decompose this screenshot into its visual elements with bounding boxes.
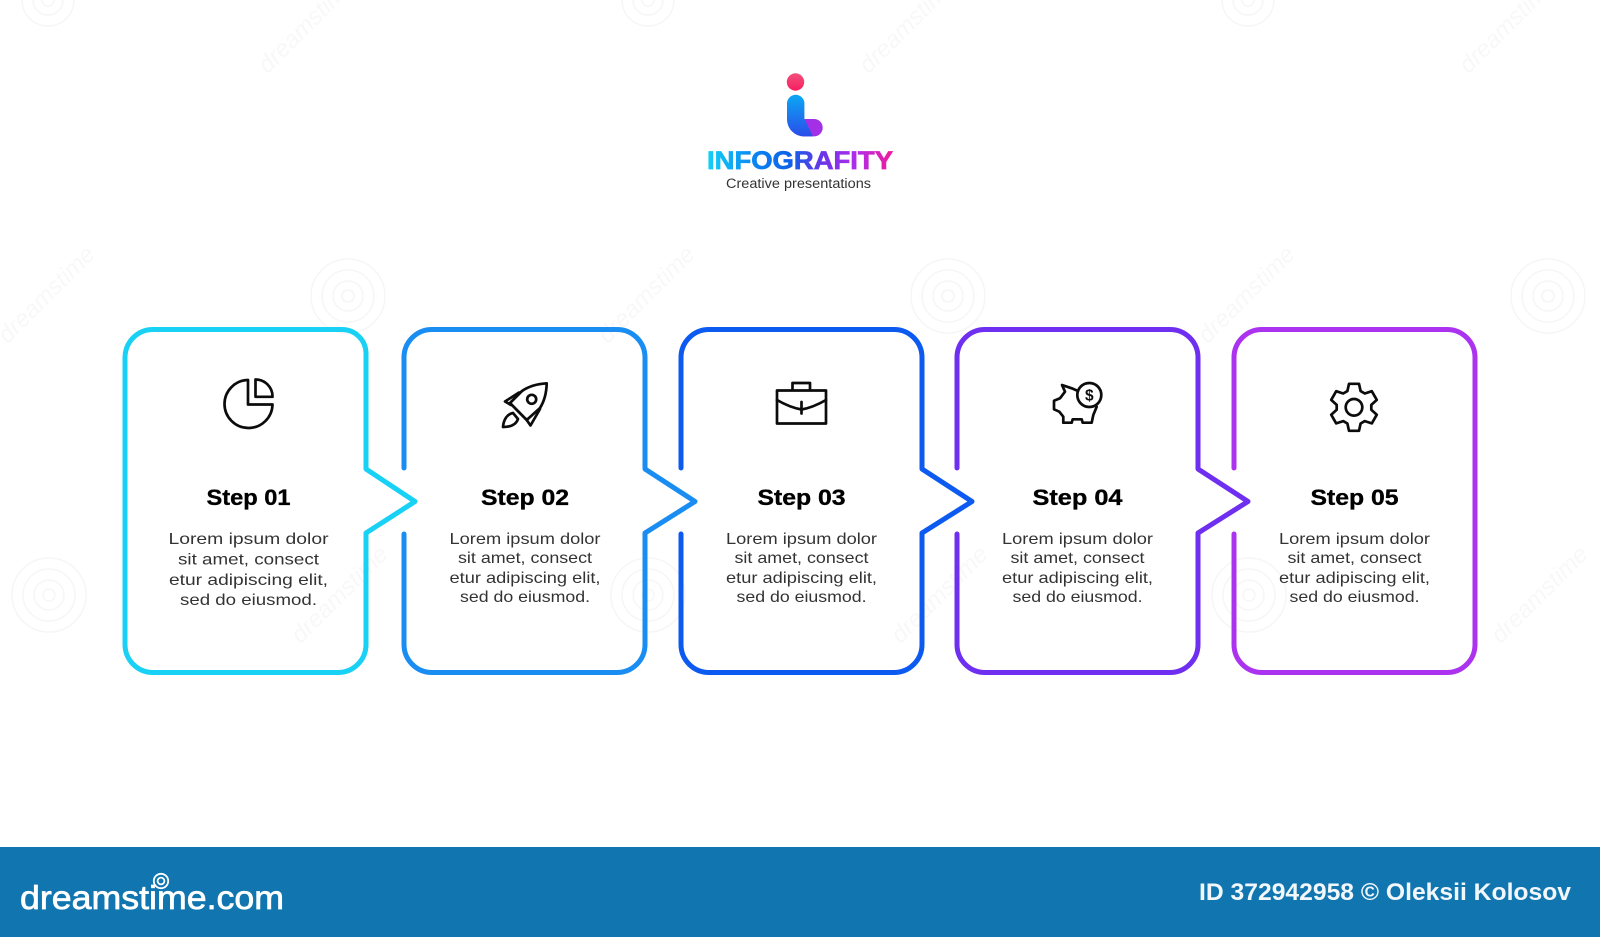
icon: briefcase [777,383,826,424]
text 05: etur adipiscing elit, [1279,570,1430,587]
watermark text [0,0,1594,649]
logo mark: L stem [787,95,813,136]
watermark text: dreamstime [1193,241,1301,349]
icon: piggy bank: $ [1085,388,1094,404]
panel: step 01 [125,330,415,672]
text 02: etur adipiscing elit, [450,570,600,587]
panel: step 05 [1234,330,1475,672]
logo wordmark: INFOGRAFITY [707,147,893,175]
text 03: sit amet, consect [734,550,869,567]
outline 02 [404,330,695,672]
watermark text: dreamstime [286,541,394,649]
text 05: sit amet, consect [1288,550,1422,567]
logo tagline: Creative presentations [726,176,871,191]
text 02: Lorem ipsum dolor [450,531,601,548]
icon: pie chart [225,380,273,428]
footer band [0,847,1600,937]
text 05 [1279,531,1431,606]
text 03: Lorem ipsum dolor [726,531,878,548]
text 03 [726,531,878,606]
text 04: sit amet, consect [1010,550,1145,567]
text 01 [168,531,329,609]
icon: dreamstime spiral [154,874,168,888]
outline 01 [125,330,415,672]
text 04: etur adipiscing elit, [1002,570,1153,587]
text 04: sed do eiusmod. [1012,589,1142,606]
panel: step 04 [957,330,1248,672]
panel: step 02 [404,330,695,672]
dreamstime wordmark: dreamstime.com [20,879,284,916]
text 04: Lorem ipsum dolor [1002,531,1154,548]
outline 04 [957,330,1248,672]
text 02: sed do eiusmod. [460,589,590,606]
logo [707,73,893,191]
watermark text: dreamstime [1486,541,1594,649]
text 04 [1002,531,1154,606]
watermark text: dreamstime [886,541,994,649]
text 05: Lorem ipsum dolor [1279,531,1431,548]
icon: gear [1331,384,1377,431]
logo mark: ball [787,73,804,91]
watermark spirals [12,0,1585,632]
outline 05 [1234,330,1475,672]
text 01: etur adipiscing elit, [169,572,328,589]
panel: step 03 [681,330,972,672]
heading 04: Step 04 [1032,485,1123,510]
text 05: sed do eiusmod. [1290,589,1420,606]
text 03: sed do eiusmod. [736,589,866,606]
text 01: sed do eiusmod. [180,592,317,609]
watermark text: dreamstime [593,241,701,349]
image id and credit: ID 372942958 © Oleksii Kolosov [1199,879,1572,906]
text 02: sit amet, consect [458,550,593,567]
text 03: etur adipiscing elit, [726,570,877,587]
outline 03 [681,330,972,672]
logo mark: L foot [802,119,823,136]
text 01: sit amet, consect [178,552,320,568]
heading 01: Step 01 [206,485,290,510]
heading 02: Step 02 [481,485,569,510]
text 02 [450,531,601,606]
icon: piggy bank [1054,383,1101,423]
icon: rocket [503,383,547,427]
heading 03: Step 03 [758,485,846,510]
heading 05: Step 05 [1310,485,1398,510]
text 01: Lorem ipsum dolor [168,531,329,548]
